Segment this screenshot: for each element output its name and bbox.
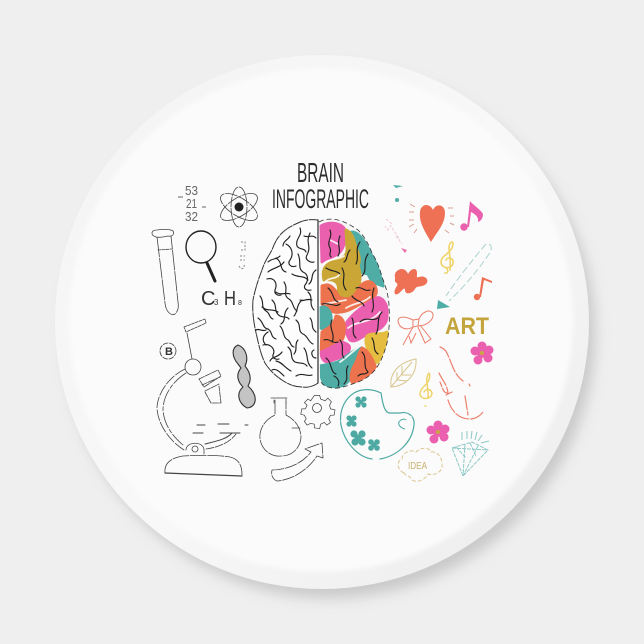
- brain: right hemisphere, coloured: [318, 218, 392, 390]
- icon: pink flower lower: [426, 420, 450, 444]
- title: [272, 157, 369, 214]
- region: orange bottom: [351, 348, 376, 384]
- icon: pink drop: [401, 248, 407, 253]
- icon: pink flower: [470, 342, 494, 364]
- icon: gear: [301, 395, 335, 429]
- icon: small sketched note: [239, 242, 245, 269]
- icon: violin: [439, 347, 483, 419]
- icon: ribbon bow: [398, 311, 433, 345]
- highlights: [323, 240, 380, 362]
- chemical formula: 3: [214, 298, 219, 307]
- teal marks: [393, 185, 403, 202]
- region: pink middle right: [346, 298, 387, 341]
- badge rim: [55, 55, 589, 589]
- numbers: 21: [186, 196, 197, 211]
- icon: orange music note: [474, 277, 492, 300]
- icon: pink pen sketch: [385, 219, 402, 244]
- icon: paint splat: [394, 269, 427, 294]
- icon: gold treble clef lower: [420, 373, 432, 406]
- region: gold upper: [323, 230, 360, 298]
- region: teal left: [320, 307, 331, 329]
- brain: right folds: [322, 230, 382, 386]
- numbers: 32: [185, 209, 198, 224]
- artwork: [152, 157, 494, 481]
- chemical formula: C: [201, 288, 215, 310]
- paint brush tip: [437, 300, 450, 309]
- badge drop shadow: [65, 68, 595, 598]
- region: teal bottom: [320, 348, 362, 388]
- icon: test tube: [152, 229, 178, 315]
- icon: idea cloud: [398, 448, 442, 481]
- region: teal upper: [352, 232, 383, 286]
- icon: pink music note: [460, 201, 483, 231]
- heart rays: [409, 204, 454, 233]
- region: gold lower right: [366, 332, 387, 362]
- region: orange middle: [322, 282, 376, 312]
- icon: coin: [160, 343, 176, 359]
- region: orange centre: [321, 316, 345, 351]
- icon: gold treble clef: [441, 242, 453, 273]
- microscope: [157, 319, 248, 476]
- chemical formula: [201, 288, 242, 310]
- numbers: 53: [185, 183, 198, 198]
- icon: atom: [216, 187, 262, 227]
- ART lettering: ART: [445, 313, 489, 340]
- numbers: [178, 183, 206, 224]
- icon: idea cloud: IDEA: [408, 461, 427, 472]
- icon: heart: [420, 205, 445, 242]
- chemical formula: H: [224, 288, 236, 310]
- icon: DNA helix: [233, 345, 255, 408]
- badge face: [69, 68, 573, 572]
- brain: left hemisphere: [253, 220, 318, 387]
- icon: diamond: [452, 431, 489, 476]
- icon: paint brush: [446, 244, 491, 301]
- region: pink lower left: [321, 342, 350, 362]
- icon: palette: [341, 390, 414, 459]
- region: pink top: [321, 223, 345, 262]
- icon: round flask: [260, 398, 301, 456]
- icon: curved arrow: [272, 443, 323, 481]
- icon: coin: B: [165, 346, 173, 358]
- chemical formula: 8: [238, 300, 242, 307]
- icon: magnifying glass: [186, 231, 216, 281]
- title: INFOGRAPHIC: [272, 184, 369, 214]
- title: BRAIN: [297, 157, 344, 188]
- icon: leaf: [391, 359, 416, 387]
